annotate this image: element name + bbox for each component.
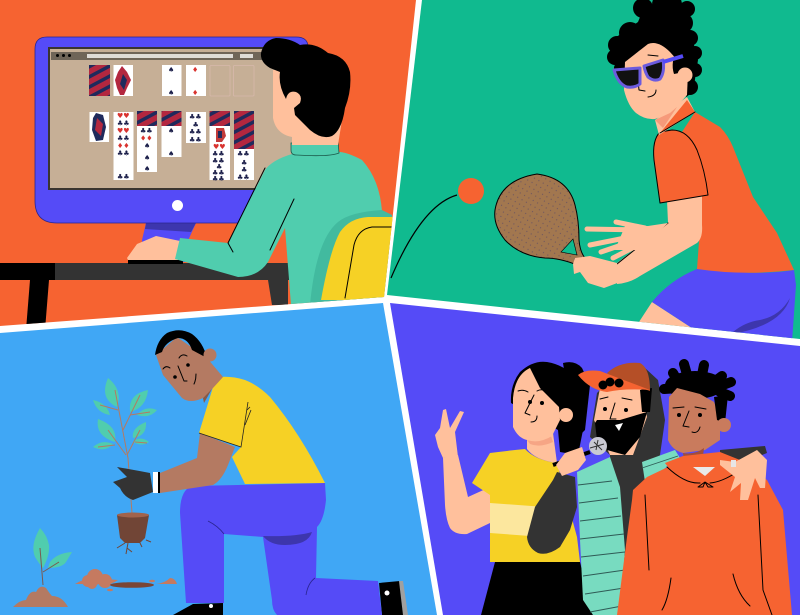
desk [0,263,291,330]
solitaire cards: ♣♣ [117,173,130,181]
solitaire cards: ♥♥ [213,143,226,151]
monitor stand [142,223,196,262]
face [513,368,560,440]
solitaire cards: ♣♣ [189,128,202,136]
pants [180,483,382,615]
neck [527,433,557,463]
hand and microphone [553,452,590,465]
solitaire cards: ♣♣ [140,127,153,135]
panel: padel player [380,0,800,345]
solitaire cards: ♣♣ [212,175,225,183]
chair [310,210,392,305]
hoodie [617,452,792,615]
solitaire cards: ♣♣ [212,169,225,177]
shirt [680,112,794,273]
solitaire cards: ♠ [144,154,150,162]
solitaire cards: ♥♥ [117,127,130,135]
solitaire cards: ♠ [168,89,174,97]
solitaire cards: ♠ [168,150,174,158]
shirt [199,377,325,484]
collar [291,141,339,156]
solitaire cards: ♣ [216,163,222,171]
hair back [511,362,583,455]
arm [617,195,702,284]
face [668,388,720,453]
skirt [481,562,593,615]
hair [261,38,350,137]
man at computer [127,38,395,305]
arm [160,433,235,493]
solitaire cards: ♠ [168,127,174,135]
monitor [35,37,308,223]
solitaire cards: ♣ [241,166,247,174]
ponytail [563,362,590,440]
shirt [175,152,382,305]
glove [113,467,153,500]
sleeve [527,472,577,554]
solitaire cards: ♣ [192,121,199,129]
solitaire cards: ♣♣ [117,120,130,128]
beard [595,412,647,455]
solitaire cards: ♠ [168,66,174,74]
solitaire cards: ♣ [241,159,247,167]
racket [495,174,585,265]
sleeve [654,130,708,203]
cap [607,363,650,391]
bearded man in hoodie [527,363,680,615]
solitaire cards: ♣♣ [117,150,130,158]
sunglasses [614,56,683,87]
solitaire cards: ♣♣ [237,150,250,158]
solitaire cards: ♠ [144,142,150,150]
shorts [652,269,796,342]
small sprout [13,528,72,607]
man kneeling [113,330,408,615]
solitaire cards: ♣♣ [117,134,130,142]
solitaire cards: ♣♣ [189,113,202,121]
solitaire cards: ♦♦ [117,142,130,150]
panel: man planting a tree [0,300,440,615]
open hand [587,222,648,258]
leg [639,302,691,328]
shoe back [379,581,405,615]
panel: solitaire on a computer [0,0,430,330]
head [273,70,342,145]
solitaire cards [89,65,254,183]
woman with peace sign [435,362,593,615]
solitaire cards: ♣♣ [189,136,202,144]
solitaire cards: ♣♣ [237,174,250,182]
striped vest [577,450,680,615]
panel: three friends [380,300,800,615]
solitaire cards: ♦♦ [140,134,153,142]
face [624,43,692,119]
collar [660,100,695,133]
solitaire cards: ♣♣ [212,150,225,158]
man in orange hoodie [617,364,792,615]
arm [443,455,490,534]
soil and hole [75,569,177,591]
keyboard [128,260,183,264]
hand [127,236,185,260]
sleeve over shoulder [720,446,767,462]
hoodie [590,368,665,545]
ball and trajectory [391,178,484,278]
neck [655,97,695,135]
curly hair [607,0,702,97]
shoe front [173,603,223,615]
potted plant [93,378,157,554]
face [594,383,647,455]
hair [155,330,207,358]
hand [435,409,464,458]
hair [664,364,731,399]
solitaire cards: ♠ [144,165,150,173]
solitaire cards: ♦ [192,89,198,97]
face details [163,355,196,384]
gripping hand [573,256,620,288]
neck and head [203,389,212,403]
solitaire cards: ♥♥ [117,112,130,120]
solitaire cards: ♣♣ [212,157,225,165]
solitaire cards: ♦ [192,66,198,74]
hand on shoulder [720,450,767,500]
shirt [472,449,580,562]
